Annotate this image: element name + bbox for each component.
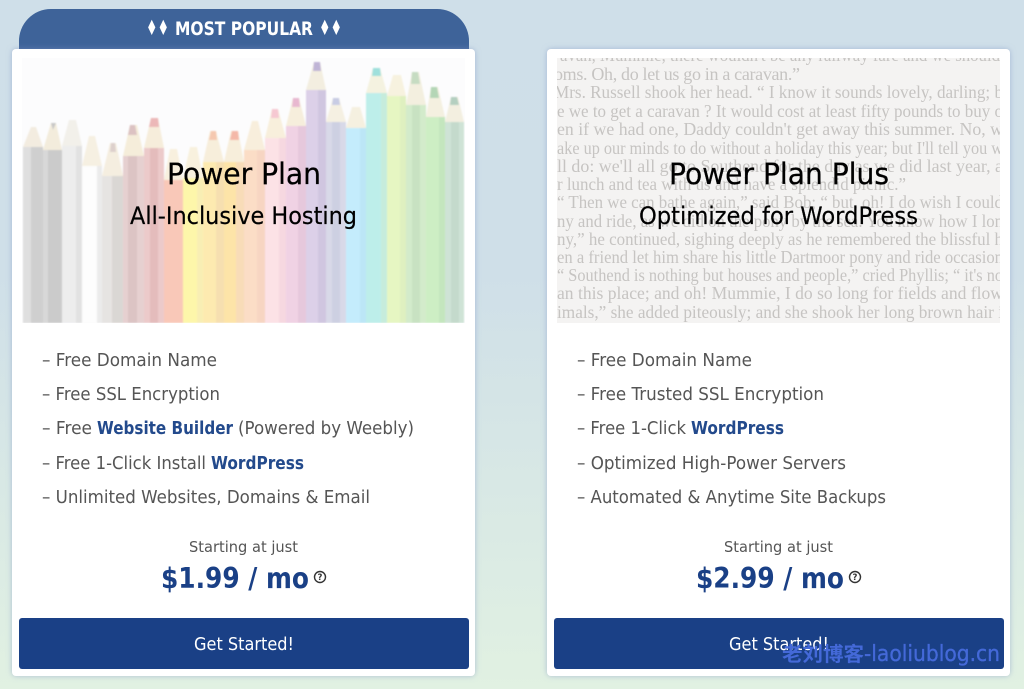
button: Get Started: Get Started! xyxy=(194,634,294,655)
watermark: 老刘博客 xyxy=(782,638,864,667)
feature list: – Automated & Anytime Site Backups xyxy=(577,488,886,508)
feature list: Website Builder xyxy=(97,419,233,439)
feature list: – Unlimited Websites, Domains & Email xyxy=(42,488,370,508)
watermark xyxy=(782,638,1000,667)
image: book page: “ Then we can bathe again,” said Bob; “ but, oh! I do wish I could xyxy=(557,192,1003,212)
button: Get Started: Get Started! xyxy=(729,634,829,655)
feature list: – Free SSL Encryption xyxy=(42,385,220,405)
feature list: – Optimized High-Power Servers xyxy=(577,454,846,474)
icon: help xyxy=(850,572,860,583)
feature list: – Free Trusted SSL Encryption xyxy=(577,385,824,405)
ribbon: most popular: ♦♦ xyxy=(319,16,342,40)
title: Power Plan Plus: Power Plan Plus xyxy=(669,157,889,191)
feature list: (Powered by Weebly) xyxy=(238,419,414,439)
feature list: WordPress xyxy=(691,419,784,439)
feature list: WordPress xyxy=(211,454,304,474)
panel: Power Plan xyxy=(12,49,475,676)
image: book page: en if we had one, Daddy couldn't get away this summer. No, w xyxy=(557,119,1003,139)
price: $2.99 / mo xyxy=(696,538,860,595)
price: $2.99 / mo: $2.99 / mo xyxy=(696,562,844,595)
feature list: – Free xyxy=(42,419,92,439)
image: book page: oms. Oh, do let us go in a caravan.” xyxy=(554,64,800,84)
image: book page: ll do: we'll all go to Southend for the day as we did last year, a xyxy=(557,156,1003,176)
subtitle: All-Inclusive Hosting: All-Inclusive Hosting xyxy=(130,202,357,230)
ribbon: most popular xyxy=(19,9,469,50)
image: book page: an this place; and oh! Mummie, I do so long for fields and flow xyxy=(557,283,1003,303)
price: $1.99 / mo: Starting at just xyxy=(189,538,298,556)
price: $1.99 / mo xyxy=(161,538,326,595)
icon: help: ? xyxy=(318,573,323,583)
feature list: – Free Domain Name xyxy=(42,351,217,371)
feature list: – Free Domain Name xyxy=(577,351,752,371)
title: Power Plan: Power Plan xyxy=(167,157,321,191)
ribbon: most popular: MOST POPULAR xyxy=(175,19,313,40)
feature list: – Free 1-Click xyxy=(577,419,687,439)
image: book page: ny and ride, as we did on the pony by the sea. You know how I lon xyxy=(557,211,1003,231)
feature list: – Free 1-Click Install xyxy=(42,454,206,474)
image: book page: e we to get a caravan ? It would cost at least fifty pounds to buy o xyxy=(557,101,1003,121)
button: Get Started xyxy=(19,618,469,669)
panel: Power Plan Plus xyxy=(547,45,1010,676)
image: book page: avan, Mummie, there wouldn't be any railway fare and we should xyxy=(560,45,1000,65)
watermark: -laoliublog.cn xyxy=(864,642,1000,667)
image: coloured pencils xyxy=(22,58,465,323)
feature list xyxy=(42,351,414,508)
price: $2.99 / mo: Starting at just xyxy=(724,538,833,556)
price: $1.99 / mo: $1.99 / mo xyxy=(161,562,309,595)
feature list xyxy=(577,351,886,508)
image: book page: imals,” she added piteously; and she shook her long brown hair i xyxy=(557,302,1003,322)
ribbon: most popular: ♦♦ xyxy=(146,16,169,40)
image: book page xyxy=(554,45,1003,323)
button: Get Started xyxy=(554,618,1004,669)
image: book page: ny,” he continued, sighing deeply as he remembered the blissful h xyxy=(557,229,1003,249)
subtitle: Optimized for WordPress: Optimized for WordPress xyxy=(639,202,918,230)
icon: help xyxy=(314,572,326,583)
image: book page: Mrs. Russell shook her head. “ I know it sounds lovely, darling; b xyxy=(554,82,1003,102)
icon: help: ? xyxy=(853,573,858,583)
image: book page: r lunch and tea with us and have a splendid picnic.” xyxy=(557,174,906,194)
